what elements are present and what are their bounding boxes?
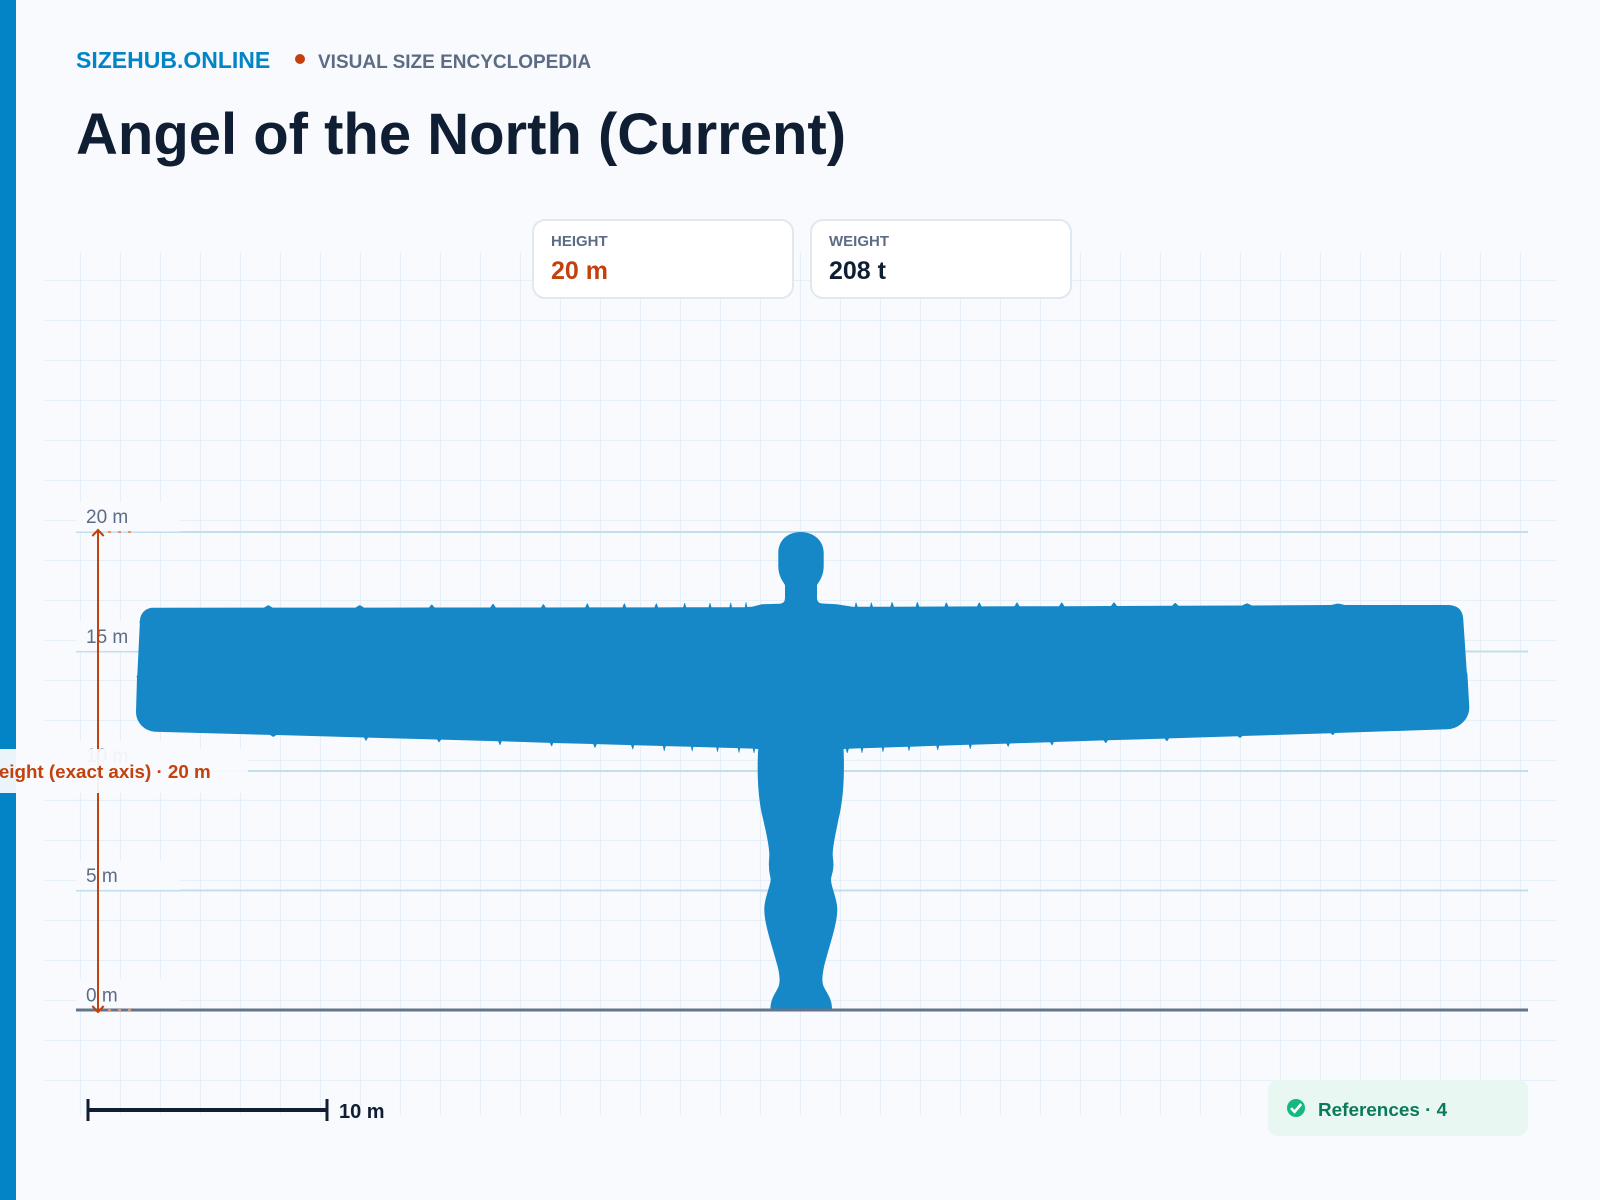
brand dot [295, 54, 305, 64]
silhouette: Angel of the North [136, 532, 1469, 1008]
title: Angel of the North (Current) [76, 102, 846, 167]
accent bar [0, 0, 16, 1200]
axis label: 0 m: 0 m [86, 986, 118, 1006]
axis label: 20 m: 20 m [86, 507, 128, 528]
axis label: 20 m [76, 502, 180, 532]
stat card: weight: 208 t [829, 257, 886, 285]
tagline: VISUAL SIZE ENCYCLOPEDIA [318, 52, 591, 73]
axis label: 15 m: 15 m [86, 627, 128, 648]
stat card: weight [810, 219, 1072, 299]
axis label: 10 m: 10 m [86, 746, 128, 767]
axis label: 10 m [76, 741, 180, 770]
stat card: height: 20 m [551, 257, 608, 285]
axis label: 5 m: 5 m [86, 866, 118, 887]
height guide dashes [98, 532, 131, 1010]
references badge: References · 4 [1318, 1100, 1448, 1121]
brand name: SIZEHUB.ONLINE [76, 47, 270, 73]
axis label: 0 m [76, 979, 180, 1008]
stat card: weight: WEIGHT [829, 233, 889, 250]
height arrow [92, 530, 104, 1012]
scale bar: 10 m [339, 1101, 385, 1123]
stat card: height [532, 219, 794, 299]
height callout [0, 749, 248, 793]
scale bar [88, 1099, 385, 1123]
stat card: height: HEIGHT [551, 233, 608, 250]
axis label: 5 m [76, 860, 180, 890]
axis label: 15 m [76, 622, 180, 651]
references badge [1268, 1080, 1528, 1136]
